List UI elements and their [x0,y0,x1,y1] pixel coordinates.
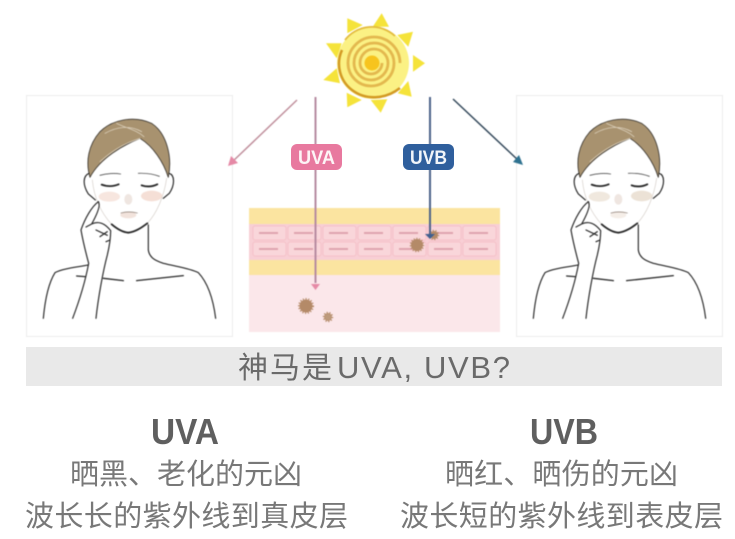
icon: sun [323,13,425,113]
skin cells [253,226,496,256]
heading bar: 神马是 [238,352,332,385]
arrow: UVA to left portrait [228,100,297,166]
label: UVA badge: UVA [298,148,335,169]
text block: UVA: 波长长的紫外线到真皮层 [25,500,348,533]
text block: UVA: UVA [151,411,219,452]
text block: UVB [400,411,723,533]
text block: UVA: 晒黑、老化的元凶 [70,458,302,491]
label: UVA badge [291,144,342,170]
label: UVB badge [403,144,454,170]
icon: woman touching face, right [533,119,706,318]
panel: left portrait [26,96,232,336]
diagram: skin layers [249,208,500,332]
text block: UVB: 晒红、晒伤的元凶 [445,458,678,491]
arrow: UVA into dermis [311,97,320,290]
text block: UVA [25,411,348,533]
melanin spots [300,231,438,321]
text block: UVB: UVB [530,411,598,452]
icon: woman touching face, left [43,119,216,318]
heading bar: UVA, UVB? [337,350,510,385]
arrow: UVB to right portrait [453,99,523,165]
text block: UVB: 波长短的紫外线到表皮层 [400,500,723,533]
label: UVB badge: UVB [410,148,447,169]
heading bar [26,347,722,386]
arrow: UVB into epidermis [425,97,435,239]
panel: right portrait [516,96,722,336]
